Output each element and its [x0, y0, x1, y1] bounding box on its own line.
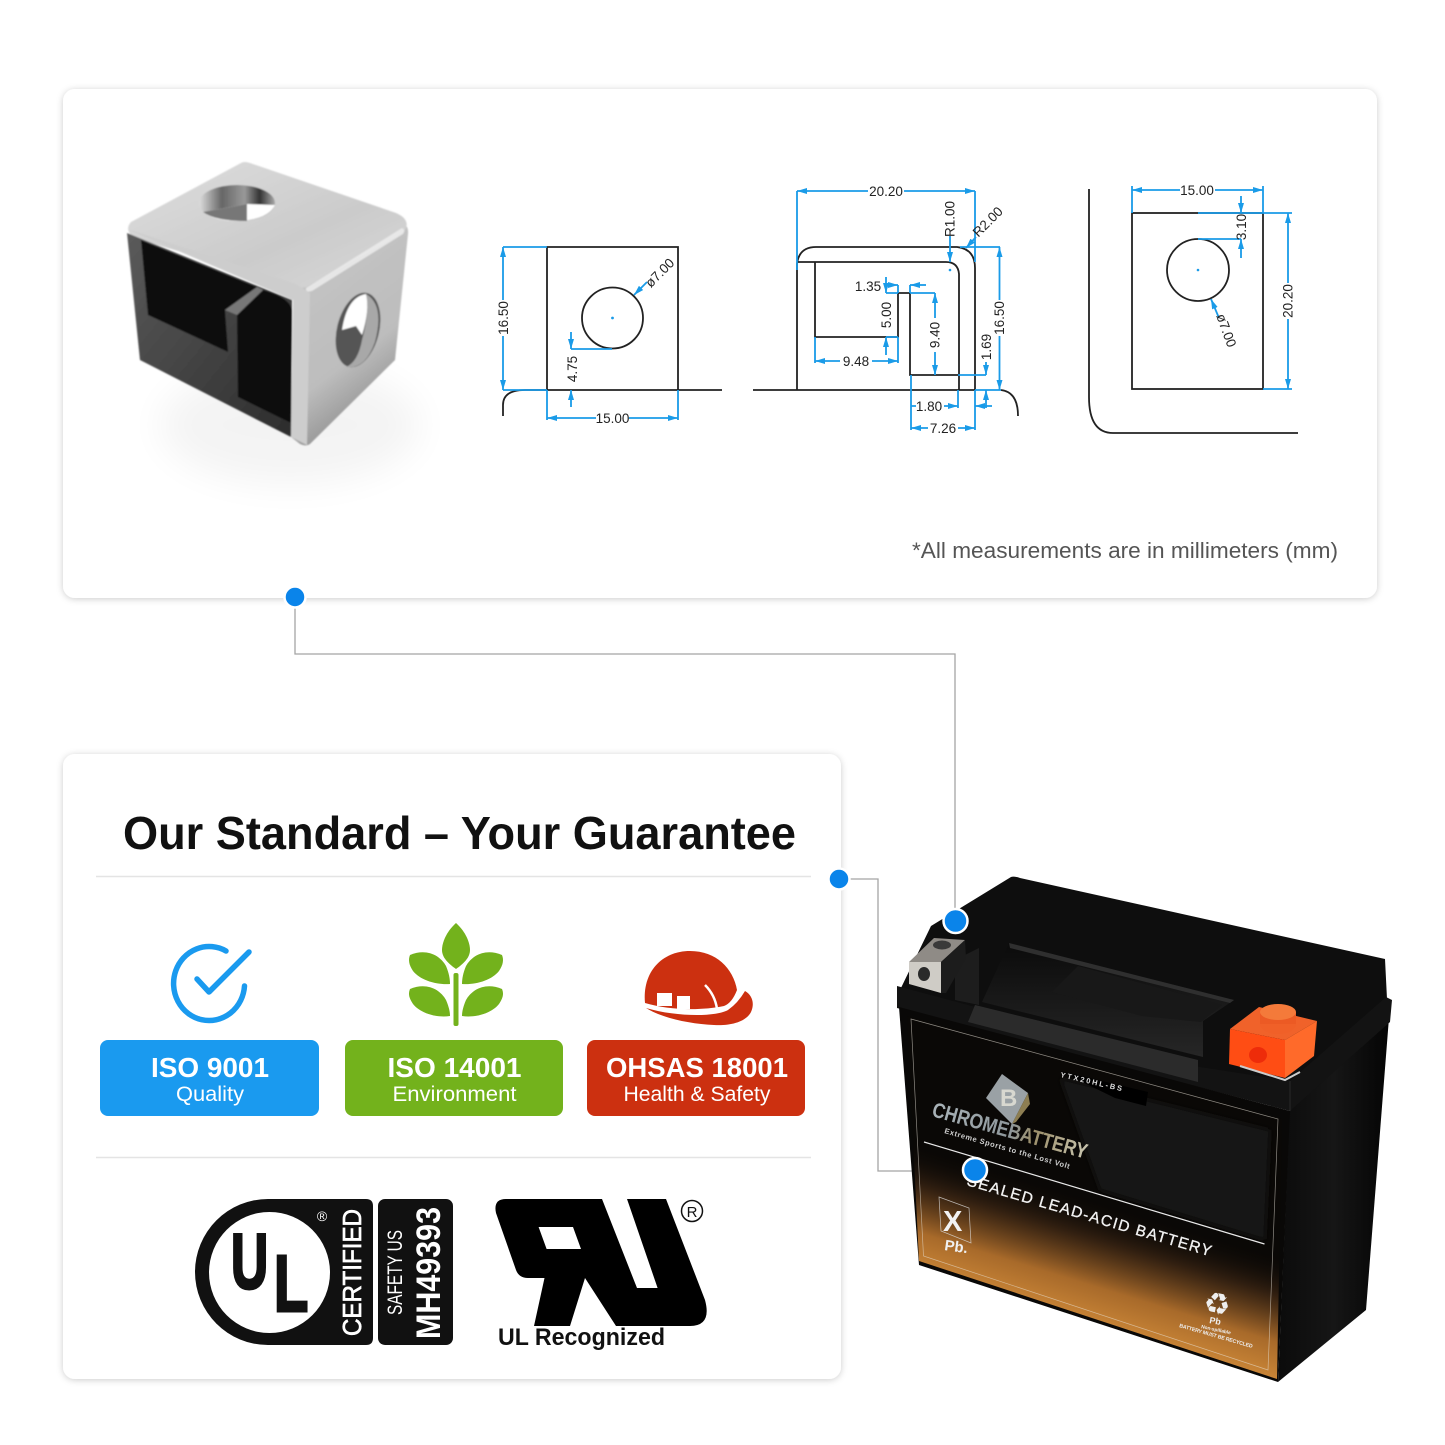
badge: ISO 9001	[100, 1040, 319, 1116]
badge: ISO 14001	[345, 1040, 563, 1116]
technical drawing: side profile: 20.20	[869, 184, 903, 199]
technical drawing: side profile: 5.00	[879, 302, 894, 328]
front face	[899, 1007, 1290, 1382]
recycle symbol: BATTERY MUST BE RECYCLED	[1178, 1323, 1253, 1350]
logo: UL certified: SAFETY US	[384, 1230, 407, 1315]
image: metal terminal block	[127, 162, 420, 485]
connector lines	[295, 597, 975, 1171]
technical drawing: front view: 15.00	[596, 411, 629, 426]
logo: chrome battery: Extreme Sports to the Lost Volt	[943, 1126, 1071, 1171]
technical drawing: side profile: 1.35	[855, 279, 881, 294]
icon: hard hat	[645, 951, 753, 1025]
panel: our standard your guarantee	[63, 754, 841, 1379]
technical drawing: side profile	[753, 184, 1018, 436]
badge: OHSAS 18001: Health & Safety	[624, 1083, 771, 1106]
battery top face	[900, 877, 1387, 1100]
positive terminal metal	[909, 938, 966, 993]
side hole	[328, 288, 388, 372]
battery right side	[1278, 1005, 1390, 1382]
model label	[1060, 1070, 1148, 1106]
logo: chrome battery: B	[1000, 1085, 1017, 1112]
technical drawing: front view: ø7.00	[642, 255, 677, 290]
logo: UL certified	[195, 1199, 453, 1345]
technical drawing: top view: 15.00	[1180, 183, 1214, 198]
tab	[225, 287, 263, 315]
panel: terminal dimensions	[63, 89, 1377, 598]
lid ledge	[897, 986, 1392, 1111]
technical drawing: top view	[1089, 183, 1298, 433]
footnote: *All measurements are in millimeters (mm)	[912, 538, 1338, 563]
technical drawing: side profile: R2.00	[970, 204, 1006, 240]
label background	[907, 1016, 1282, 1379]
badge: OHSAS 18001: OHSAS 18001	[606, 1052, 788, 1083]
badge: ISO 9001: ISO 9001	[151, 1052, 269, 1083]
icon: leaves	[409, 923, 503, 1026]
badge: ISO 9001: Quality	[176, 1083, 245, 1106]
logo: chrome battery: CHROMEBATTERY	[930, 1099, 1090, 1164]
negative terminal cap orange	[1229, 1004, 1317, 1080]
label divider line	[924, 1142, 1264, 1244]
logo: UL certified: ®	[317, 1208, 328, 1224]
callout dot: terminal panel	[284, 586, 306, 608]
callout dot: battery label	[963, 1158, 987, 1182]
recycle symbol	[1178, 1285, 1253, 1350]
technical drawing: top view: 20.20	[1280, 284, 1296, 318]
technical drawing: side profile: 1.69	[979, 334, 994, 360]
logo: UL certified: U	[231, 1218, 268, 1306]
crossed bin symbol: Pb.	[943, 1237, 969, 1257]
top hole	[199, 185, 275, 221]
badge: ISO 14001: ISO 14001	[388, 1052, 522, 1083]
callout dot: battery terminal	[944, 909, 968, 933]
technical drawing: top view: ø7.00	[1213, 312, 1239, 349]
logo: UL certified: L	[274, 1238, 308, 1328]
dark front face	[127, 233, 292, 437]
logo: UL certified: CERTIFIED	[337, 1209, 367, 1336]
crossed bin symbol: X	[943, 1206, 963, 1238]
technical drawing: side profile: R1.00	[942, 201, 958, 237]
technical drawing: side profile: 16.50	[992, 301, 1007, 335]
logo: UL certified: MH49393	[410, 1207, 448, 1339]
top face	[128, 162, 407, 288]
front frame	[127, 229, 310, 445]
right face	[291, 225, 408, 446]
model label: YTX20HL-BS	[1060, 1070, 1123, 1093]
label title: SEALED LEAD-ACID BATTERY	[965, 1173, 1213, 1260]
icon: check circle	[174, 947, 249, 1021]
callout dot: standards panel	[828, 868, 850, 890]
vent tray	[955, 943, 1234, 1082]
technical drawing: front view: 4.75	[565, 356, 580, 382]
label outline	[911, 1019, 1278, 1370]
badge: OHSAS 18001	[587, 1040, 805, 1116]
logo: UL recognized: UL Recognized	[498, 1324, 665, 1351]
orange gradient	[907, 1016, 1282, 1379]
technical drawing: side profile: 1.80	[916, 399, 942, 414]
badge: ISO 14001: Environment	[392, 1083, 517, 1106]
upper opening	[141, 240, 257, 352]
logo: UL recognized	[495, 1199, 707, 1351]
recycle symbol: Non-spillable	[1201, 1324, 1232, 1336]
technical drawing: front view	[496, 247, 722, 426]
recycle symbol: Pb	[1209, 1315, 1222, 1327]
technical drawing: side profile: 9.48	[843, 354, 869, 369]
technical drawing: top view: 3.10	[1234, 214, 1249, 240]
heading: Our Standard – Your Guarantee	[123, 807, 796, 859]
logo: UL recognized: R	[687, 1204, 698, 1221]
logo: chrome battery	[930, 1074, 1090, 1171]
right opening	[237, 290, 292, 423]
image: battery	[897, 877, 1392, 1382]
technical drawing: side profile: 9.40	[928, 322, 942, 348]
recycle symbol: ♻	[1200, 1285, 1234, 1325]
technical drawing: front view: 16.50	[496, 301, 511, 335]
technical drawing: side profile: 7.26	[930, 421, 956, 436]
crossed bin symbol	[939, 1197, 971, 1257]
